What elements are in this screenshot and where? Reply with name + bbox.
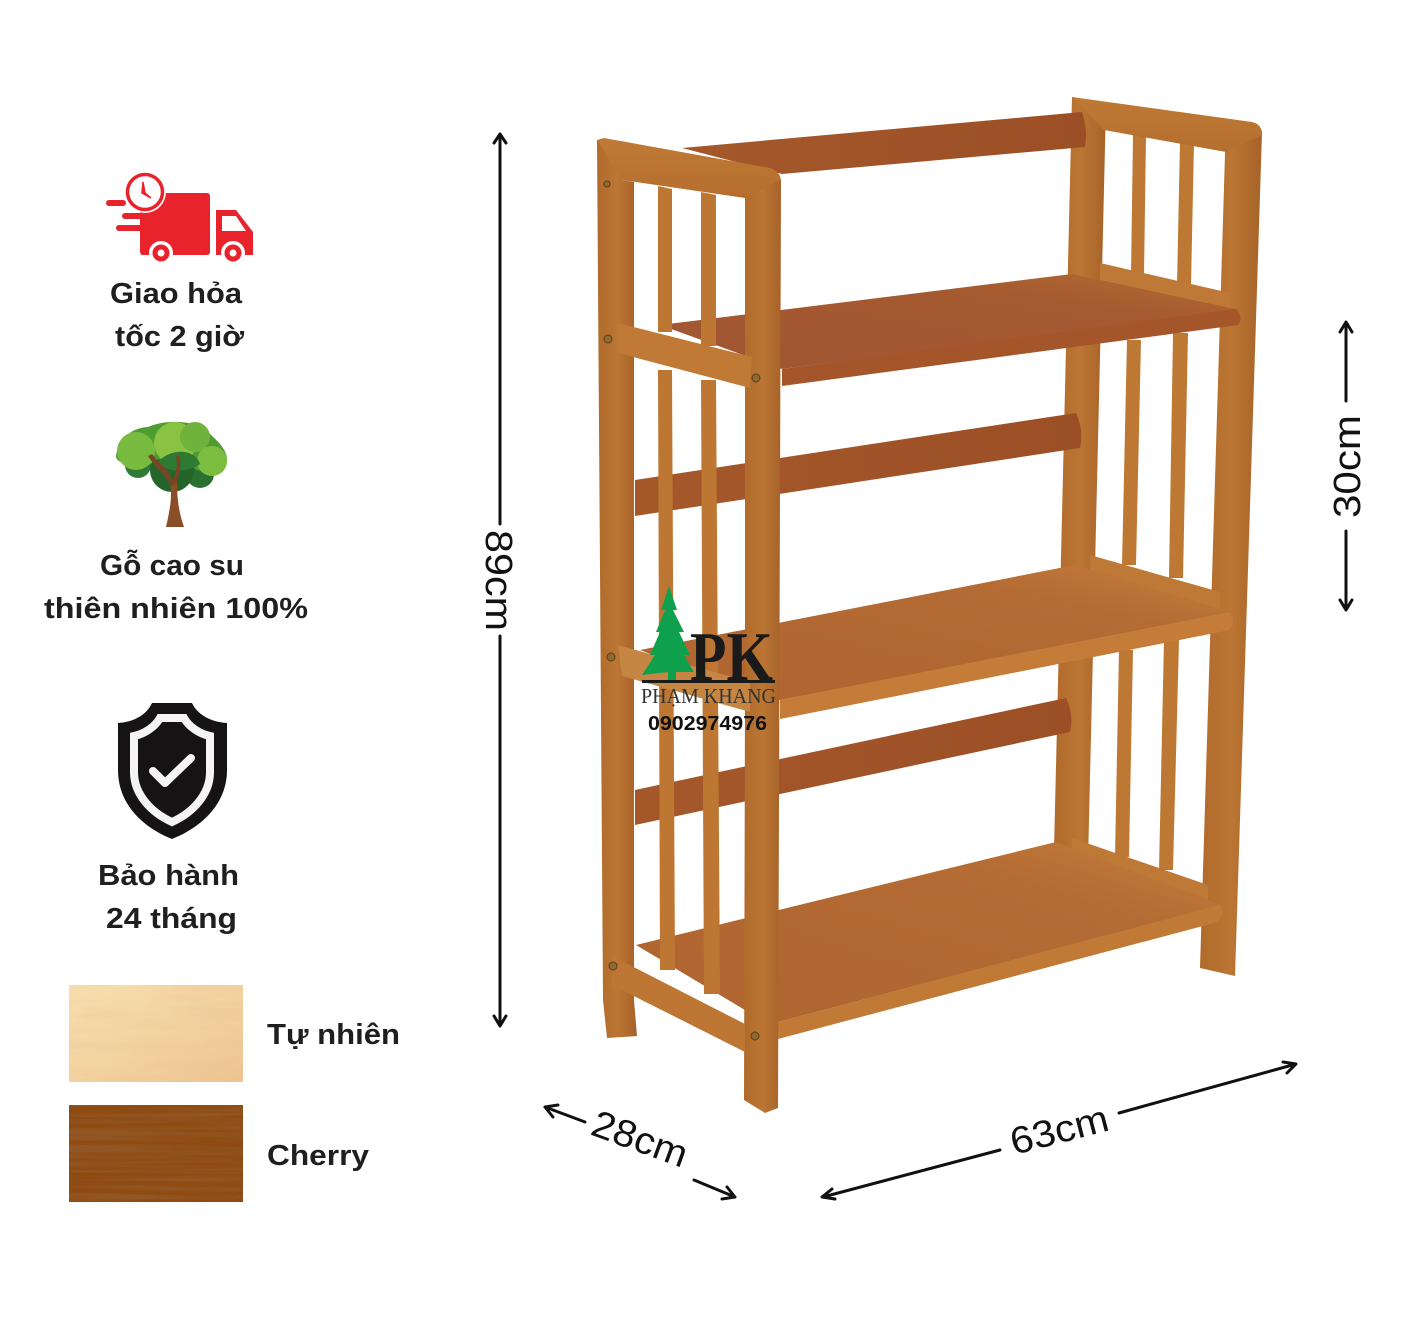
dimension: shelf gap 30cm: 30cm [1327,415,1369,518]
back rails [635,112,1086,825]
dimension: height 89cm [477,134,519,1026]
text: express delivery: Giao hỏa [110,278,243,310]
swatch: cherry wood [69,1105,243,1202]
right side slats [1115,135,1194,870]
logo: Phạm Khang watermark: PHẠM KHANG [641,684,776,708]
label: natural wood: Tự nhiên [267,1019,400,1051]
swatch: natural wood [69,985,243,1082]
text: natural rubber wood: thiên nhiên 100% [44,593,308,625]
dimension: height 89cm: 89cm [477,530,519,631]
icon: warranty shield [118,703,227,839]
right side rails [1072,263,1230,905]
dimension: depth 28cm: 28cm [586,1103,693,1176]
logo: Phạm Khang watermark: 0902974976 [648,713,767,735]
dimension: shelf gap 30cm [1327,322,1369,610]
logo: Phạm Khang watermark: PK [690,619,773,696]
dimension: width 63cm [822,1062,1296,1199]
text: express delivery: tốc 2 giờ [115,321,244,353]
left side slats [658,186,720,994]
label: cherry wood: Cherry [267,1140,369,1172]
right front post [1200,122,1262,976]
product: three-tier wooden bookshelf [597,97,1262,1113]
shelf 2 [640,565,1233,719]
logo: Phạm Khang watermark [641,586,776,735]
text: warranty: Bảo hành [98,860,239,892]
icon: tree [116,422,227,527]
right top rail [1072,97,1262,152]
left front post [744,168,781,1113]
left rear post [597,140,637,1038]
left top rail [597,138,780,198]
text: natural rubber wood: Gỗ cao su [100,548,244,582]
shelf 1 [660,274,1241,386]
left middle rail mid [618,645,750,712]
shelf 3 [636,842,1223,1039]
text: warranty [98,860,239,935]
rear post [1054,97,1106,862]
left middle rail upper [618,323,752,388]
text: warranty: 24 tháng [106,903,237,935]
dimension: width 63cm: 63cm [1006,1098,1113,1164]
screws [604,181,760,1040]
text: express delivery [110,278,244,353]
text: natural rubber wood [44,548,308,625]
left bottom rail [612,956,745,1052]
dimension: depth 28cm [545,1103,735,1199]
icon: delivery truck [106,171,253,265]
